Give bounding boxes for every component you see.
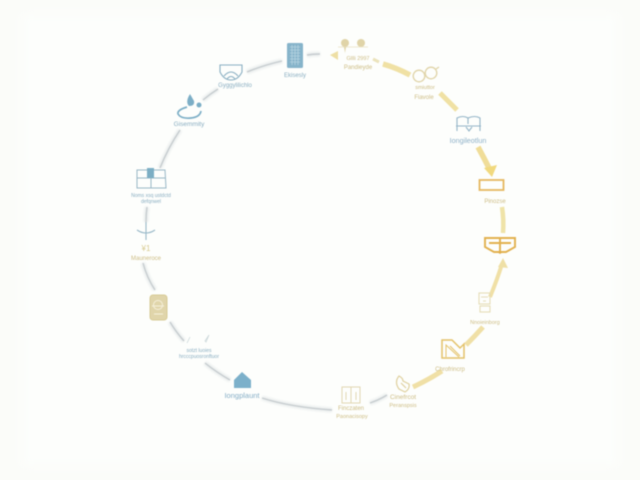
step: leaves: sotzt luoies <box>186 348 212 354</box>
icon: dome <box>220 65 242 80</box>
step: people: Pandieyde <box>344 65 373 71</box>
yellow arrows <box>330 51 508 387</box>
step: tablet <box>150 295 167 320</box>
icon: book <box>342 387 360 403</box>
step: map <box>131 168 171 205</box>
step: rings: smiuttor <box>415 85 435 91</box>
arrowhead: toward box <box>484 165 497 177</box>
icon: leaves <box>187 335 209 343</box>
step: rings: Fiavole <box>414 95 434 101</box>
step: leaves: hrcccpuosronftuor <box>179 354 219 360</box>
step: dome <box>218 65 252 89</box>
step: box <box>480 180 506 205</box>
step: house <box>224 372 260 400</box>
step: box: Pinozse <box>484 199 506 205</box>
icon: water drop and swirl <box>178 94 202 118</box>
icon: figure <box>479 293 490 312</box>
step: shield <box>485 238 515 254</box>
arrowhead: toward building <box>330 51 338 60</box>
step: leaves <box>179 335 219 360</box>
step: bird <box>389 376 417 409</box>
arrowhead: toward shield <box>498 258 508 268</box>
grey ring arcs <box>143 54 387 410</box>
icon: house <box>234 372 251 388</box>
step: bird: Cinefrcot <box>390 394 416 401</box>
icon: people <box>338 39 368 53</box>
cycle diagram <box>131 39 515 420</box>
step: bird: Peranspsis <box>389 403 417 409</box>
step: bed: Iongileotlun <box>450 136 486 145</box>
icon: map panel <box>137 168 166 188</box>
icon: turbine <box>137 222 155 240</box>
step: figure <box>470 293 500 326</box>
step: turbine <box>131 222 162 262</box>
step: book: Paonacisopy <box>336 414 368 420</box>
step: people <box>338 39 373 71</box>
icon: bird <box>396 376 409 392</box>
step: map: defqnwel <box>141 199 161 205</box>
step: folder: Chrofrincrp <box>435 367 465 373</box>
step: turbine: ¥1 <box>141 244 151 253</box>
icon: shield <box>485 238 515 252</box>
step: house: Iongplaunt <box>224 391 260 400</box>
step: dome: Gyggylilichlo <box>218 83 252 89</box>
step: people: Gllli 2997 <box>347 56 369 62</box>
step: turbine: Mauneroce <box>131 256 162 262</box>
icon: folder <box>442 340 464 358</box>
step: bed <box>450 116 486 145</box>
step: book <box>336 387 368 420</box>
icon: box <box>480 180 504 190</box>
step: building: Ekisesly <box>284 73 306 79</box>
icon: building <box>287 43 303 68</box>
step: building <box>284 43 306 79</box>
step: rings <box>413 67 439 101</box>
step: swirl <box>174 94 205 128</box>
icon: rings <box>413 67 439 82</box>
step: figure: Nnoieinborg <box>470 320 500 326</box>
step: folder <box>435 340 465 373</box>
icon: tablet <box>150 295 167 320</box>
step: swirl: Gisemmity <box>174 121 205 128</box>
step: book: Finczaten <box>338 406 364 412</box>
step: map: Noms xsq ustdctd <box>131 193 171 199</box>
icon: bed <box>456 116 481 131</box>
